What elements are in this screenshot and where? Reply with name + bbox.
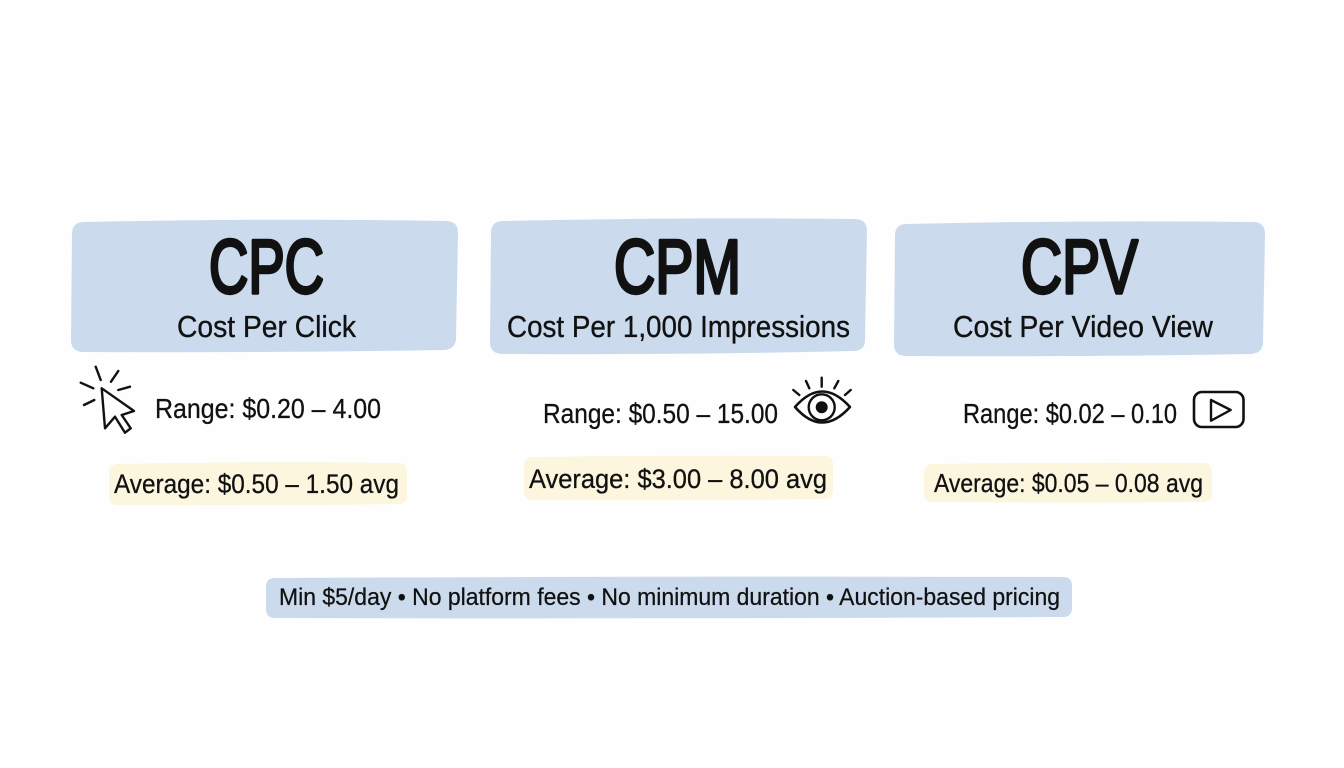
text: CPC range: Range: $0.20 – 4.00 bbox=[155, 393, 381, 424]
panel: CPC column bbox=[71, 220, 458, 505]
footer note strip: Min $5/day • No platform fees • No minimum duration • Auction-based pricing bbox=[279, 584, 1060, 611]
CPM header box bbox=[490, 218, 867, 354]
heading: CPM: CPM bbox=[614, 225, 741, 310]
CPC average highlight: Average: $0.50 – 1.50 avg bbox=[114, 469, 399, 499]
CPC header box bbox=[71, 220, 458, 352]
CPV average highlight bbox=[924, 463, 1212, 502]
subheading: Cost Per Click: Cost Per Click bbox=[177, 309, 356, 344]
CPM average highlight: Average: $3.00 – 8.00 avg bbox=[529, 464, 827, 494]
panel: CPV column bbox=[894, 221, 1265, 503]
CPC average highlight bbox=[109, 462, 407, 505]
heading: CPV: CPV bbox=[1021, 225, 1138, 310]
text: CPM range: Range: $0.50 – 15.00 bbox=[543, 398, 778, 429]
icon: cursor click bbox=[81, 367, 134, 433]
heading: CPC: CPC bbox=[209, 225, 324, 310]
icon: video play bbox=[1194, 392, 1244, 427]
CPV header box bbox=[894, 221, 1265, 356]
subheading: Cost Per 1,000 Impressions: Cost Per 1,000 Impressions bbox=[507, 309, 850, 344]
CPV average highlight: Average: $0.05 – 0.08 avg bbox=[934, 468, 1203, 498]
icon: eye bbox=[793, 378, 851, 422]
text: CPV range: Range: $0.02 – 0.10 bbox=[963, 398, 1177, 429]
CPM average highlight bbox=[524, 456, 833, 500]
footer note strip bbox=[266, 577, 1072, 618]
subheading: Cost Per Video View: Cost Per Video View bbox=[953, 309, 1214, 344]
panel: CPM column bbox=[490, 218, 867, 500]
